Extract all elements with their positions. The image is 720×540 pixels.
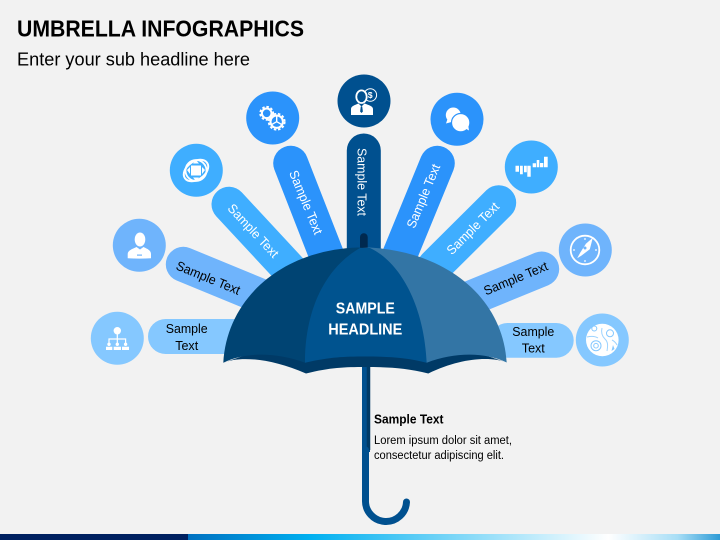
canopy centre panel	[305, 248, 427, 363]
pill: left 3: Sample Text	[225, 201, 282, 261]
text block: description: consectetur adipiscing elit.	[374, 450, 504, 462]
umbrella handle	[365, 358, 406, 522]
pill: left 1: Sample	[166, 321, 208, 336]
canopy headline: SAMPLE	[336, 300, 395, 317]
canopy headline	[328, 300, 402, 338]
icon: person	[113, 219, 166, 272]
icon: hierarchy	[91, 312, 144, 365]
umbrella canopy	[223, 233, 507, 374]
pill: right 2	[449, 258, 550, 307]
canopy headline: HEADLINE	[328, 321, 402, 338]
canopy tip	[360, 233, 368, 251]
icon: bar chart	[505, 140, 558, 194]
pill: right 1	[490, 323, 574, 358]
canopy left panel	[223, 248, 366, 363]
icon: advisor	[338, 74, 390, 128]
subtitle: Enter your sub headline here	[17, 50, 250, 70]
text block: description: Lorem ipsum dolor sit amet,	[374, 435, 512, 447]
pill: left 1	[148, 319, 258, 354]
icon: chat bubbles	[430, 93, 484, 146]
pill: right 1: Sample	[512, 324, 554, 339]
pill: left 4	[286, 163, 330, 264]
pill: left 4: Sample Text	[286, 168, 326, 237]
pill: left 1: Text	[175, 338, 199, 353]
icon: gears	[246, 92, 299, 144]
text block: description	[374, 412, 512, 462]
pill: right 3: Sample Text	[443, 199, 502, 258]
pill: right 1: Text	[522, 341, 545, 356]
pill: right 2: Sample Text	[481, 258, 550, 298]
pill: right 4	[396, 161, 443, 264]
pill: centre: Sample Text	[354, 148, 370, 216]
pill: left 2: Sample Text	[174, 258, 243, 298]
icon: advisor: $	[368, 90, 373, 100]
footer bar	[0, 534, 720, 540]
icon: compass	[559, 224, 612, 276]
icon: planet	[576, 314, 629, 366]
icon: globe	[170, 144, 223, 197]
canopy right panel	[362, 248, 507, 363]
pill: centre	[354, 148, 370, 265]
pill: left 2	[174, 258, 275, 302]
title: UMBRELLA INFOGRAPHICS	[17, 16, 304, 42]
canopy underside	[223, 340, 507, 374]
text block: description: Sample Text	[374, 412, 444, 426]
pill: right 4: Sample Text	[403, 161, 443, 230]
